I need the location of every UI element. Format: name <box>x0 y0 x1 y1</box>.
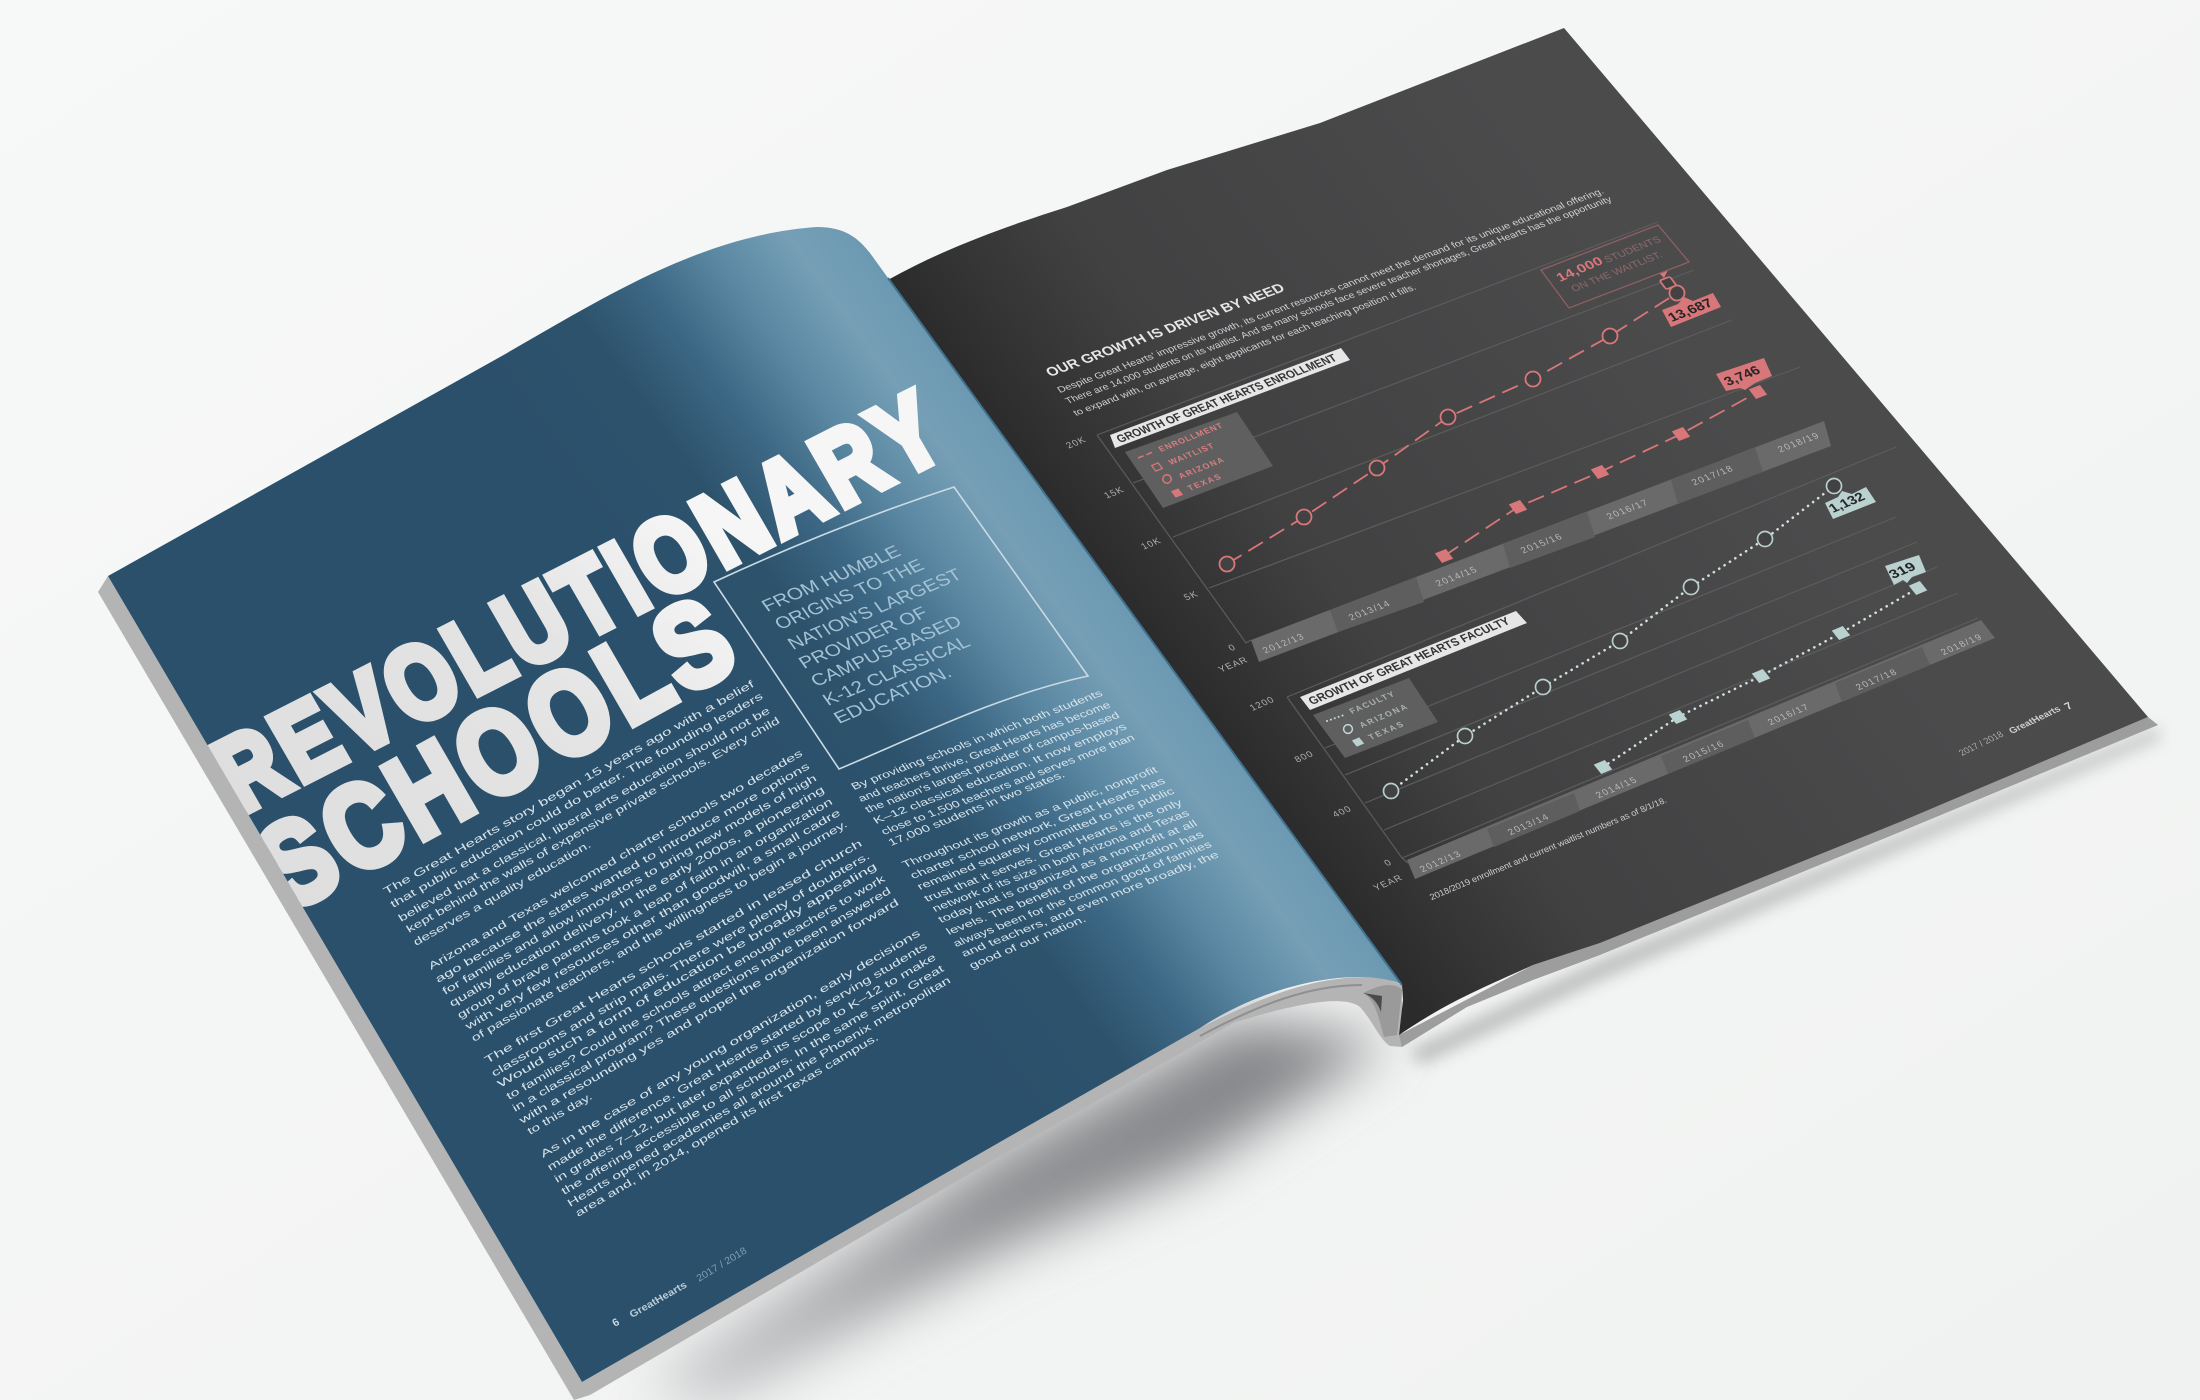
body text column 1: of passionate teachers, and the willingness to begin a journey. <box>470 819 850 1045</box>
callout box: FROM HUMBLE <box>758 542 905 615</box>
year band: 2016/17 <box>1605 498 1650 522</box>
chart: growth of Great Hearts enrollment <box>1064 222 1831 675</box>
body text column 1: believed that a classical, liberal arts education should not be <box>397 706 773 925</box>
body text column 1: with a resounding yes and propel the organization forward <box>516 897 901 1127</box>
y axis labels: 0 <box>1382 858 1395 869</box>
callout box: NATION'S LARGEST <box>784 565 966 653</box>
body text column 1: The Great Hearts story began 15 years ago with a belief <box>382 679 757 898</box>
legend: faculty: TEXAS <box>1366 720 1406 742</box>
legend: faculty <box>1313 678 1438 758</box>
footnote: 2018/2019 enrollment and current waitlist numbers as of 8/1/18. <box>1426 796 1669 902</box>
year band: 2015/16 <box>1519 532 1564 556</box>
legend: faculty: FACULTY <box>1347 689 1397 716</box>
body text column 2: K–12 classical education. It now employs <box>871 722 1129 826</box>
body text column 2: trust that it serves. Great Hearts is the only <box>922 798 1186 904</box>
data badge: 319 <box>1885 555 1926 585</box>
right page footer: GreatHearts <box>2007 704 2063 736</box>
callout box <box>714 487 1088 769</box>
data badge: 319: 319 <box>1886 559 1919 581</box>
body text column 1: the offering accessible to all scholars. In the same spirit, Great <box>560 964 946 1198</box>
y axis labels: YEAR <box>1216 655 1251 675</box>
body text column 1 <box>382 679 953 1220</box>
data badge: 1,132 <box>1825 487 1876 519</box>
y axis labels: 800 <box>1292 749 1317 765</box>
body text column 2: 17,000 students in two states. <box>886 770 1068 848</box>
page block edge: right page <box>1399 717 2158 1047</box>
body text column 2: By providing schools in which both students <box>849 689 1105 792</box>
right page footer <box>1957 701 2075 758</box>
year band <box>1407 620 1995 879</box>
data badge: 13,687: 13,687 <box>1665 296 1716 324</box>
y axis labels: YEAR <box>1371 873 1406 893</box>
right page heading: OUR GROWTH IS DRIVEN BY NEED <box>1042 280 1288 379</box>
y axis labels: 10K <box>1139 536 1164 552</box>
shadow under right page <box>1410 728 2160 1065</box>
body text column 1: quality education delivery. In the early 2000s, a pioneering <box>448 785 827 1010</box>
headline: REVOLUTIONARY <box>194 372 961 834</box>
left page <box>108 227 1402 1382</box>
series: Arizona enrollment <box>1220 286 1684 572</box>
y axis labels <box>1064 435 1251 675</box>
shadow under left page <box>640 1020 1390 1400</box>
body text column 2: always been for the common good of families <box>951 840 1214 949</box>
series: Texas enrollment <box>1435 385 1767 563</box>
year band: 2012/13 <box>1418 850 1463 875</box>
legend: enrollment: ARIZONA <box>1176 455 1226 481</box>
page block edge: left page <box>98 576 1402 1400</box>
body text column 2: good of our nation. <box>967 914 1089 971</box>
body text column 1: The first Great Hearts schools started in leased church <box>483 838 865 1067</box>
legend: enrollment <box>1125 412 1273 508</box>
body text column 2: Throughout its growth as a public, nonprofit <box>900 765 1160 870</box>
body text column 1: in a classical program? These questions have been answered <box>511 886 894 1115</box>
callout: waitlist <box>1541 225 1689 308</box>
body text column 1: for families and allow innovators to bring new models of high <box>441 773 819 998</box>
callout box: CAMPUS-BASED <box>807 612 966 690</box>
y axis labels: 5K <box>1182 589 1201 603</box>
right page intro text: There are 14,000 students on its waitlist. And as many schools face severe teacher shortages, Great Hearts has the opportunity <box>1063 195 1615 406</box>
callout: waitlist: STUDENTS <box>1602 235 1664 265</box>
left page footer: 2017 / 2018 <box>695 1245 749 1285</box>
body text column 1: to this day. <box>526 1091 595 1138</box>
body text column 2: remained squarely committed to the public <box>915 787 1177 892</box>
callout: waitlist: 14,000 <box>1553 254 1606 284</box>
y axis labels: 20K <box>1064 435 1089 451</box>
legend: faculty: ARIZONA <box>1357 702 1409 730</box>
y axis labels: 15K <box>1102 485 1127 501</box>
right page <box>888 28 2148 1035</box>
waitlist marker <box>1659 270 1676 289</box>
y axis labels: 0 <box>1226 642 1239 654</box>
left page footer <box>610 1245 749 1330</box>
year band: 2015/16 <box>1681 740 1726 765</box>
left page footer: 6 <box>610 1316 622 1330</box>
body text column 1: group of brave parents took a leap of faith in an organization <box>456 797 835 1022</box>
chart: growth of Great Hearts faculty <box>1247 447 1995 893</box>
callout box: EDUCATION. <box>830 663 955 727</box>
body text column 1: with very few resources other than goodwill, a small cadre <box>462 808 843 1033</box>
body text column 2: and teachers, and even more broadly, the <box>959 850 1222 959</box>
year band <box>1251 421 1831 662</box>
body text column 2: levels. The benefit of the organization has <box>944 830 1206 937</box>
right page intro text: Despite Great Hearts' impressive growth, its current resources cannot meet the demand for its unique educational offering. <box>1055 187 1606 395</box>
body text column 1: Hearts opened academies all around the Phoenix metropolitan <box>566 975 953 1210</box>
data badge: 3,746 <box>1716 358 1772 391</box>
year band: 2012/13 <box>1261 632 1306 656</box>
data badge: 13,687 <box>1662 293 1721 327</box>
body text column 2: charter school network, Great Hearts has <box>908 776 1168 881</box>
legend: enrollment: ENROLLMENT <box>1156 421 1225 454</box>
body text column 2: today that is organized as a nonprofit at all <box>936 819 1200 925</box>
body text column 2: the nation's largest provider of campus-based <box>863 711 1122 815</box>
chart title tag: faculty: GROWTH OF GREAT HEARTS FACULTY <box>1305 615 1513 707</box>
body text column 1: classrooms and strip malls. There were plenty of doubters. <box>490 851 872 1080</box>
body text column 1: deserves a quality education. <box>412 840 593 949</box>
year band: 2018/19 <box>1776 431 1821 455</box>
callout: waitlist: ON THE WAITLIST. <box>1569 250 1665 294</box>
year band: 2013/14 <box>1506 813 1551 838</box>
right page intro text: to expand with, on average, eight applicants for each teaching position it fills. <box>1071 283 1419 418</box>
body text column 1: area and, in 2014, opened its first Texas campus. <box>574 1032 881 1220</box>
callout box: PROVIDER OF <box>795 603 931 672</box>
y axis labels: 400 <box>1330 804 1355 820</box>
legend: enrollment: WAITLIST <box>1166 441 1217 467</box>
spine page stack <box>888 278 1402 1037</box>
left page footer: GreatHearts <box>628 1280 690 1321</box>
data badge: 1,132: 1,132 <box>1826 490 1868 515</box>
year band: 2016/17 <box>1766 703 1811 728</box>
year band: 2014/15 <box>1434 565 1479 589</box>
year band: 2017/18 <box>1854 668 1899 693</box>
y axis labels <box>1247 695 1406 893</box>
body text column 1: that public education could do better. The founding leaders <box>389 691 765 911</box>
body text column 2: network of its size in both Arizona and Texas <box>930 809 1192 914</box>
series: Texas faculty <box>1594 581 1927 774</box>
body text column 2: close to 1,500 teachers and serves more than <box>879 733 1138 837</box>
callout box: K-12 CLASSICAL <box>819 632 974 709</box>
body text column 1: As in the case of any young organization, early decisions <box>539 928 923 1161</box>
y axis labels: 1200 <box>1247 695 1277 713</box>
year band: 2017/18 <box>1690 464 1735 488</box>
body text column 1: made the difference. Great Hearts started by serving students <box>546 941 930 1174</box>
callout box: ORIGINS TO THE <box>771 555 928 633</box>
right page footer: 7 <box>2062 701 2075 712</box>
year band: 2013/14 <box>1347 599 1392 623</box>
body text column 1: in grades 7–12, but later expanded its scope to K–12 to make <box>553 952 939 1186</box>
series: Arizona faculty <box>1384 478 1842 798</box>
body text column 2 <box>849 689 1222 971</box>
year band: 2018/19 <box>1939 633 1984 658</box>
data badge: 3,746: 3,746 <box>1721 363 1764 388</box>
body text column 1: ago because the states wanted to introduce more options <box>434 761 812 986</box>
body text column 1: Arizona and Texas welcomed charter schools two decades <box>427 748 805 973</box>
headline: SCHOOLS <box>236 572 754 934</box>
right page footer: 2017 / 2018 <box>1957 730 2006 758</box>
year band: 2014/15 <box>1594 776 1639 801</box>
legend: enrollment: TEXAS <box>1185 472 1223 493</box>
body text column 1: kept behind the walls of expensive private schools. Every child <box>405 716 782 936</box>
body text column 1: to families? Could the schools attract enough teachers to work <box>505 873 888 1103</box>
body text column 2: and teachers thrive, Great Hearts has become <box>856 700 1114 804</box>
body text column 1: Would such a form of education be broadly appealing <box>496 861 879 1091</box>
chart title tag: enrollment: GROWTH OF GREAT HEARTS ENROLLMENT <box>1113 351 1340 445</box>
